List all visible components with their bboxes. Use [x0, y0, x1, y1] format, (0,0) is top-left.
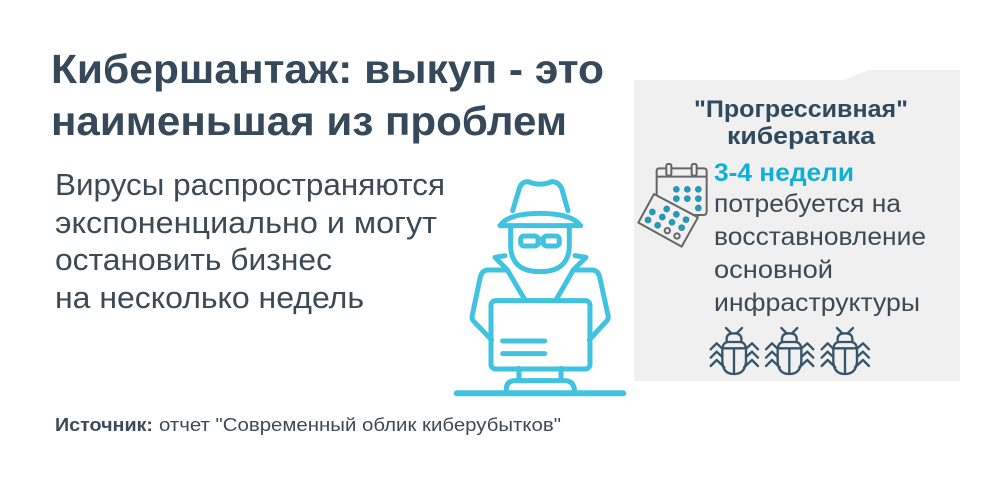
- icon: calendars: [638, 164, 707, 247]
- icon: three bugs: [711, 328, 869, 374]
- panel description: [714, 190, 926, 317]
- panel heading: "Прогрессивная": [694, 96, 908, 123]
- panel description: потребуется на: [714, 190, 901, 218]
- source note: Источник:: [55, 415, 153, 435]
- panel heading: [694, 96, 908, 150]
- panel: progressive cyberattack background: [634, 70, 960, 381]
- body text: [55, 167, 445, 315]
- source note: отчет "Современный облик киберубытков": [159, 415, 561, 435]
- panel description: инфраструктуры: [714, 289, 920, 317]
- body text: на несколько недель: [55, 280, 364, 315]
- icon: bug 1: [711, 328, 758, 374]
- title: Кибершантаж: выкуп - это: [51, 46, 604, 92]
- title: [51, 46, 604, 144]
- panel heading: кибератака: [727, 123, 876, 150]
- icon: bug 3: [822, 328, 869, 374]
- panel description: основной: [714, 256, 833, 284]
- body text: Вирусы распространяются: [55, 167, 445, 202]
- title: наименьшая из проблем: [51, 98, 567, 144]
- body text: остановить бизнес: [55, 242, 332, 277]
- panel description: восставновление: [714, 223, 926, 251]
- body text: экспоненциально и могут: [55, 205, 437, 240]
- icon: hacker at a computer: [457, 182, 623, 393]
- highlighted duration: 3-4 недели: [714, 159, 854, 187]
- icon: bug 2: [766, 328, 813, 374]
